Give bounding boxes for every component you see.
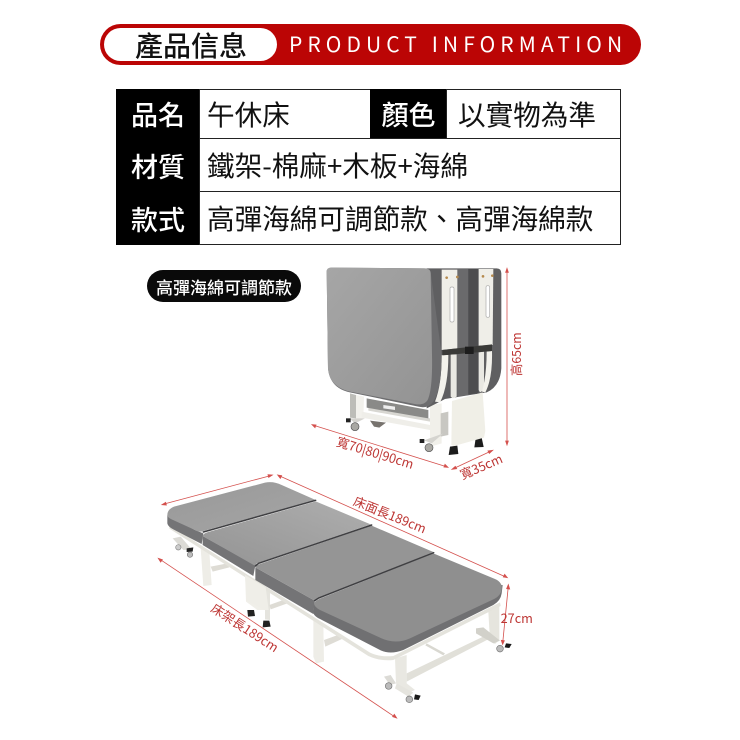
- unfolded bed: legs: [201, 548, 500, 693]
- row: colour value: [446, 89, 621, 139]
- row: material value: 鐵架-棉麻+木板+海綿: [207, 144, 468, 184]
- row: product name label: 品名: [131, 94, 185, 133]
- folded bed: white hinge brackets: [435, 269, 494, 402]
- dimension arrow: bed height: [501, 585, 510, 644]
- row: style value: [199, 191, 621, 245]
- row: style value: 高彈海綿可調節款、高彈海綿款: [207, 197, 593, 237]
- mattress fold gaps: [203, 500, 434, 601]
- dimension label: frame length: 床架長189cm: [208, 598, 283, 656]
- unfolded bed: far caster assembly: [173, 537, 193, 557]
- unfolded bed: white frame rail: [169, 525, 501, 660]
- mattress segment 2: [203, 501, 371, 576]
- header title pill: 產品信息: [135, 24, 247, 64]
- row: material label: [116, 138, 200, 192]
- dimension arrow: frame length: [158, 558, 397, 718]
- header english subtitle: PRODUCT INFORMATION: [289, 29, 627, 59]
- row: material label: 材質: [131, 146, 185, 184]
- row: style label: [116, 191, 200, 245]
- dimension label: height: 高65cm: [507, 332, 525, 376]
- mattress segment 4: [313, 553, 503, 652]
- dimension label: width: 寬70|80|90cm: [334, 431, 416, 473]
- dimension arrow: width: [312, 425, 448, 467]
- unfolded bed: end panel: [245, 575, 269, 610]
- folded bed: mattress front face: [327, 268, 442, 407]
- row: colour label: [370, 89, 447, 138]
- unfolded bed: casters: [384, 643, 512, 703]
- row: colour label: 顏色: [382, 94, 436, 133]
- variant label pill: [147, 270, 301, 302]
- folded bed: strap: [442, 344, 492, 355]
- row: material value: [199, 138, 621, 192]
- folded bed: casters: [346, 418, 484, 455]
- row: product name value: [199, 89, 371, 139]
- row: colour value: 以實物為準: [458, 93, 596, 133]
- folded bed with dimensions: [312, 268, 525, 483]
- mattress segment 3: [255, 526, 433, 614]
- mattress segment 1: [167, 482, 316, 544]
- dimension arrow: height: [506, 268, 508, 445]
- dimension label: depth: 寬35cm: [456, 448, 505, 483]
- dimension arrow: depth: [452, 450, 493, 469]
- dimension arrow: bed width: [162, 475, 272, 505]
- dimension label: surface length: 床面長189cm: [351, 491, 430, 537]
- row: product name label: [116, 89, 200, 138]
- row: product name value: 午休床: [207, 93, 290, 133]
- variant label pill: 高彈海綿可調節款: [156, 274, 292, 298]
- header banner: [100, 24, 641, 65]
- specification table: [116, 89, 621, 245]
- folded bed: mattress side layers: [427, 268, 501, 408]
- dimension arrow: surface length: [278, 475, 507, 578]
- unfolded bed with dimensions: [158, 475, 533, 718]
- dimension label: bed height: 27cm: [501, 608, 533, 627]
- folded bed: rear frame: [350, 393, 448, 446]
- header title pill: [104, 28, 277, 61]
- folded bed: white end panel: [451, 392, 485, 446]
- row: style label: 款式: [131, 198, 185, 238]
